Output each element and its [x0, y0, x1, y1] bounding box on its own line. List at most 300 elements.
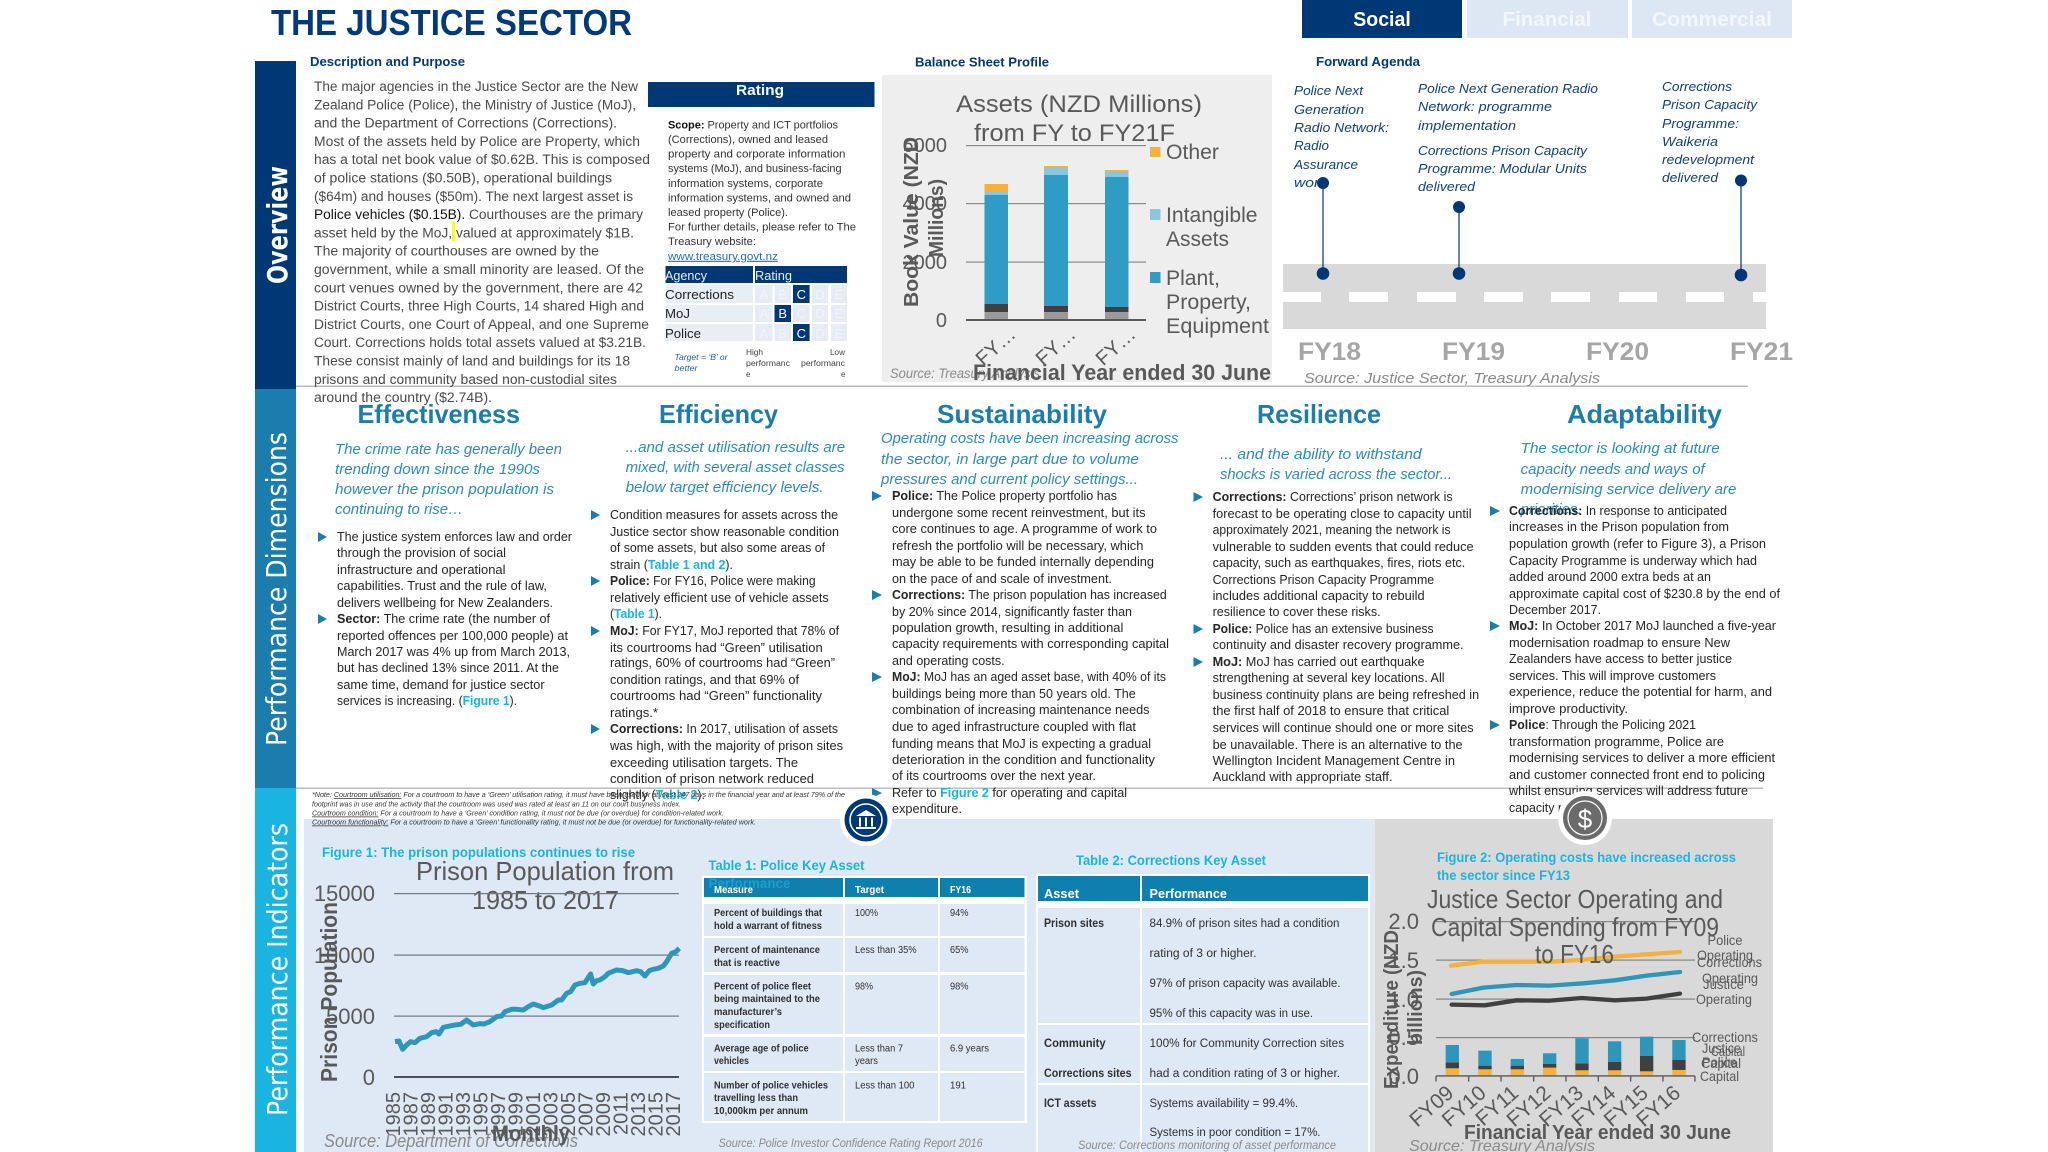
bullets: Police: Police has an extensive business — [1213, 622, 1434, 636]
table rows: Corrections sites — [1044, 1068, 1132, 1080]
bullets: refresh the portfolio will be necessary, which — [892, 539, 1143, 553]
table frame — [702, 876, 1027, 1123]
table rows: manufacturer’s — [714, 1007, 782, 1018]
bullets: Refer to Figure 2 for operating and capital — [892, 786, 1127, 800]
legend: Property, — [1166, 291, 1251, 314]
agenda text: FY18 — [1293, 84, 1389, 190]
x axis labels: FY11 — [1471, 1081, 1523, 1131]
timeline: forward agenda — [1283, 80, 1793, 387]
bullets: condition ratings, and that 69% of — [610, 673, 800, 687]
intro: continuing to rise… — [335, 502, 463, 518]
caption: Table 2: Corrections Key Asset — [1076, 853, 1266, 868]
rating table: MoJ — [665, 306, 690, 321]
caption: Table 1: Police Key Asset — [708, 858, 865, 873]
stacked bars — [984, 166, 1128, 320]
column: sustainability — [872, 399, 1178, 816]
x axis labels: FY09 — [1405, 1081, 1458, 1132]
table header: Measure — [714, 885, 753, 896]
bullets: approximately 2021, meaning the network is — [1213, 523, 1451, 537]
table rows: 94% — [950, 908, 969, 919]
bullets: deterioration in the condition and functionality — [892, 753, 1156, 767]
rating scope text: www.treasury.govt.nz — [667, 251, 778, 263]
bullets: modernisation roadmap to ensure New — [1509, 636, 1731, 650]
agenda text: FY21: Waikeria — [1662, 135, 1718, 149]
rating header — [648, 82, 874, 107]
panel: indicators background — [304, 819, 1375, 1152]
bullets: approximate capital cost of $230.8 by the end of — [1509, 587, 1781, 601]
bullets: December 2017. — [1509, 603, 1601, 617]
column: adaptability — [1490, 399, 1781, 815]
rating scope text: Treasury website: — [668, 236, 756, 248]
agenda text: FY21: Programme: — [1662, 117, 1739, 131]
rating table: B — [778, 326, 787, 341]
text block: description: Police vehicles ($0.15B). Courthouses are the primary — [314, 207, 643, 222]
x axis labels: 2017 — [663, 1092, 685, 1136]
x axis with ticks — [1436, 1076, 1695, 1082]
chart title — [1427, 884, 1723, 969]
text block: description: government, while a small minority are leased. Of the — [314, 262, 644, 277]
table rows: specification — [714, 1020, 770, 1031]
y axis labels: 0 — [936, 310, 947, 332]
bullets: but has declined 13% since 2011. At the — [337, 661, 559, 675]
agenda text: FY21: delivered — [1662, 171, 1719, 185]
text block: description: Court. Corrections holds total assets valued at $3.21B. — [314, 335, 646, 350]
bullets: Corrections: The prison population has increased — [892, 588, 1167, 602]
chart title: from FY to FY21F — [974, 120, 1175, 147]
table rows: had a condition rating of 3 or higher. — [1150, 1068, 1340, 1080]
x axis title: Financial Year ended 30 June — [1464, 1122, 1731, 1144]
bullets: undergone some recent reinvestment, but its — [892, 506, 1146, 520]
footnote: footprint was in use and the activity that the courtroom was used was rated at least an 11 on our court busyness index. — [312, 800, 681, 808]
bullets: resilience to cover these risks. — [1213, 605, 1381, 619]
bullets: delivers wellbeing for New Zealanders. — [337, 596, 553, 610]
bullets: relatively efficient use of vehicle assets — [610, 591, 829, 605]
table rows: Less than 100 — [855, 1080, 915, 1092]
x axis labels: FY13 — [1535, 1081, 1588, 1132]
operating lines — [1451, 952, 1680, 1005]
table rows — [714, 908, 989, 1117]
bullets: vulnerable to sudden events that could reduce — [1213, 540, 1474, 554]
figure 2: operating and capital spending chart — [1381, 850, 1762, 1152]
bullets: due to aged infrastructure coupled with flat — [892, 720, 1137, 734]
x axis labels: 1991 — [436, 1092, 458, 1136]
bullets: Corrections: In 2017, utilisation of assets — [610, 722, 838, 736]
bullets: services. This will improve customers — [1509, 669, 1716, 683]
x axis labels: 1995 — [470, 1092, 492, 1136]
bullets: buildings being more than 50 years old. The — [892, 687, 1136, 701]
table header — [1044, 887, 1227, 901]
table rows: Percent of police fleet — [714, 982, 812, 992]
agenda text: FY18: Generation — [1294, 103, 1364, 117]
figure 1: prison population chart — [314, 845, 685, 1151]
rating table — [665, 266, 847, 341]
bullets: slightly (Table 2). — [610, 788, 705, 802]
heading: Effectiveness — [358, 399, 520, 429]
table rows: rating of 3 or higher. — [1150, 948, 1256, 960]
rating table: E — [835, 287, 844, 302]
x axis labels: FY… — [972, 323, 1020, 370]
x axis labels: 2003 — [540, 1092, 562, 1136]
panel: rating — [648, 82, 874, 379]
column: efficiency — [591, 399, 845, 802]
series labels: Justice — [1703, 976, 1744, 992]
bullets: capacity, such as earthquakes, fires, riots etc. — [1213, 556, 1465, 570]
intro — [1220, 447, 1452, 483]
icon: institution building — [840, 794, 892, 846]
bullets: added around 2000 extra beds at an — [1509, 570, 1711, 584]
intro: however the prison population is — [335, 482, 554, 498]
caption overflow: Performance — [708, 876, 791, 891]
rating table: B — [778, 287, 787, 302]
agenda text: FY18: Radio Network: — [1294, 121, 1389, 135]
chart title: Prison Population from — [416, 856, 674, 886]
legend: Other — [1166, 141, 1219, 164]
x axis title: Monthly — [492, 1121, 571, 1146]
intro: pressures and current policy settings... — [880, 472, 1138, 488]
year labels: FY20 — [1586, 338, 1649, 366]
rating table: D — [815, 306, 825, 321]
bullets: capabilities. Trust and the rule of law, — [337, 579, 547, 593]
x axis labels: 1993 — [453, 1092, 475, 1136]
rating key: better — [674, 364, 698, 373]
table header — [714, 885, 971, 896]
x axis labels: 2005 — [558, 1092, 580, 1136]
bullets: Zealanders have access to better justice — [1509, 652, 1732, 666]
tab: financial: Financial — [1502, 9, 1592, 31]
intro: priorities. — [1520, 502, 1582, 518]
legend: Assets — [1166, 228, 1229, 251]
chart title — [416, 856, 674, 915]
series labels: Corrections — [1697, 954, 1762, 970]
table rows: 6.9 years — [950, 1044, 989, 1054]
rating header: Rating — [736, 82, 784, 99]
y axis title — [901, 137, 948, 307]
text block: description: prisons and community based non-custodial sites — [314, 372, 617, 387]
bullets: MoJ: MoJ has carried out earthquake — [1213, 655, 1425, 669]
y axis title: Expenditure (NZD — [1381, 930, 1403, 1089]
text block: description: around the country ($2.74B). — [314, 390, 492, 405]
bullets: funding means that MoJ is expecting a gradual — [892, 737, 1151, 751]
x axis labels: FY16 — [1632, 1081, 1685, 1132]
rating table: D — [815, 326, 825, 341]
rating scope text: information systems, corporate — [668, 178, 823, 190]
x axis labels — [972, 323, 1140, 370]
table rows: Less than 35% — [855, 945, 917, 956]
agenda text: FY18: Police Next — [1294, 84, 1364, 98]
intro: the sector, in large part due to volume — [881, 452, 1139, 468]
table 2: corrections key asset — [1036, 853, 1370, 1152]
bullets: The justice system enforces law and order — [337, 530, 572, 544]
rating key: e — [841, 370, 846, 379]
text block: description: has a total net book value of $0.62B. This is composed — [314, 152, 650, 167]
table rows: Number of police vehicles — [714, 1080, 828, 1092]
rating scope text: information systems, and owned and — [668, 192, 851, 204]
chart title: 1985 to 2017 — [472, 885, 619, 915]
x axis labels: FY… — [1032, 323, 1080, 370]
bullets: through the provision of social — [337, 546, 506, 560]
intro: modernising service delivery are — [1521, 482, 1736, 498]
bullets: may be able to be funded internally depending — [892, 555, 1154, 569]
table rows: Systems availability = 99.4%. — [1150, 1098, 1298, 1110]
rating scope text: Scope: Property and ICT portfolios — [668, 119, 838, 131]
table rows: being maintained to the — [714, 994, 820, 1005]
x axis labels: 2013 — [628, 1092, 650, 1136]
bullets: strengthening at several key locations. All — [1213, 671, 1445, 685]
footnote: Courtroom functionality: For a courtroom to have a ‘Green’ functionality rating, it must not be due (or overdue) for functionality-related work. — [312, 818, 756, 826]
agenda text: FY19: Corrections Prison Capacity — [1418, 144, 1588, 158]
rating table: C — [797, 306, 806, 321]
series labels: Police — [1702, 1054, 1737, 1070]
x axis title: Financial Year ended 30 June — [973, 360, 1271, 385]
sidebar: overview — [255, 61, 296, 389]
bullets: (Table 1). — [610, 607, 662, 621]
heading: Efficiency — [659, 399, 779, 429]
x axis labels — [1405, 1081, 1685, 1132]
table rows: 98% — [855, 982, 873, 992]
table rows: 100% — [855, 908, 878, 919]
series labels: Operating — [1696, 991, 1752, 1007]
table rows: vehicles — [714, 1056, 749, 1067]
legend: Plant, — [1166, 267, 1220, 290]
bullets: continuity and disaster recovery programme. — [1213, 638, 1464, 652]
bullets: modernising services to deliver a more efficient — [1509, 751, 1776, 765]
capital bars — [1446, 1037, 1686, 1075]
chart title — [956, 91, 1202, 147]
agenda text: FY18: Assurance — [1293, 158, 1358, 172]
y axis title: Millions) — [926, 179, 948, 257]
bullets: ratings, 60% of courtrooms had “Green” — [610, 656, 835, 670]
table rows: Community — [1044, 1038, 1106, 1050]
bullets: condition of prison network reduced — [610, 772, 814, 786]
heading: Adaptability — [1567, 399, 1723, 429]
column: effectiveness — [318, 399, 572, 708]
x axis labels: FY10 — [1438, 1081, 1491, 1132]
chart title: Justice Sector Operating and — [1427, 884, 1723, 914]
table rows: 65% — [950, 945, 969, 956]
bullets: was high, with the majority of prison sites — [609, 739, 843, 753]
y axis labels: 1.5 — [1388, 948, 1419, 973]
caption: Figure 1: The prison populations continues to rise — [322, 845, 635, 860]
chart: assets — [882, 75, 1272, 385]
y axis title: Prison Population — [316, 902, 342, 1082]
bullets: combination of increasing maintenance needs — [892, 703, 1150, 717]
source: Source: Justice Sector, Treasury Analysis — [1304, 370, 1601, 387]
text block: description: Most of the assets held by Police are Property, which — [314, 134, 640, 149]
footnote — [312, 790, 845, 826]
series labels: Justice — [1702, 1040, 1741, 1056]
text block: description: and the Department of Corrections (Corrections). — [314, 116, 617, 131]
x axis labels: 2009 — [593, 1092, 615, 1136]
rating table: A — [759, 287, 768, 302]
bullets: Corrections Prison Capacity Programme — [1213, 573, 1434, 587]
x axis labels: 1987 — [400, 1092, 422, 1136]
y axis labels — [1388, 909, 1419, 1089]
caption — [1437, 850, 1736, 883]
y axis title — [1381, 930, 1427, 1089]
table rows: Prison sites — [1044, 918, 1104, 930]
tab: social: Social — [1353, 9, 1411, 31]
y axis title: billions) — [1405, 970, 1427, 1045]
bullets: Condition measures for assets across the — [610, 508, 838, 522]
bullets: Auckland with appropriate staff. — [1213, 770, 1393, 784]
table rows: that is reactive — [714, 958, 780, 969]
intro: ...and asset utilisation results are — [626, 440, 845, 456]
text block: description: The major agencies in the Justice Sector are the New — [314, 79, 638, 94]
bullets: Corrections: Corrections’ prison network is — [1213, 490, 1453, 504]
text block: description: The majority of courthouses are owned by the — [314, 244, 599, 259]
bullets: Capacity Programme is underway which had — [1509, 554, 1757, 568]
pins — [1317, 174, 1747, 281]
y axis labels: 1.0 — [1388, 987, 1419, 1012]
agenda text: FY19 — [1418, 82, 1598, 194]
agenda text: FY18: work — [1294, 176, 1328, 190]
rating table: Corrections — [665, 287, 735, 302]
intro: trending down since the 1990s — [335, 462, 540, 478]
table rows: ICT assets — [1044, 1098, 1096, 1110]
table rows — [1044, 918, 1344, 1139]
y axis title: Book Value (NZD — [901, 137, 923, 307]
text block: description: asset held by the MoJ, valued at approximately $1B. — [314, 225, 634, 240]
bullets: Justice sector show reasonable condition — [610, 525, 839, 539]
rating scope text — [667, 119, 856, 263]
table header: Asset — [1044, 887, 1080, 901]
bullets: includes additional capacity to rebuild — [1213, 589, 1425, 603]
bullets — [1490, 504, 1781, 815]
tab: social — [1302, 0, 1462, 38]
text block: description: District Courts, one Court of Appeal, and one Supreme — [314, 317, 649, 332]
footnote: Courtroom condition: For a courtroom to have a ‘Green’ condition rating, it must not be due (or overdue) for condition-related work. — [312, 808, 724, 818]
x axis labels — [383, 1092, 685, 1136]
agenda text: FY21: Prison Capacity — [1662, 98, 1758, 112]
rating table: E — [835, 326, 844, 341]
chart title: Assets (NZD Millions) — [956, 91, 1202, 118]
table rows: 10,000km per annum — [714, 1106, 808, 1117]
agenda text: FY19: implementation — [1418, 119, 1516, 133]
bullets: be unavailable. There is an alternative to the — [1213, 738, 1463, 752]
bullets: Corrections: In response to anticipated — [1509, 504, 1727, 518]
bullets: and operating costs. — [892, 654, 1005, 668]
sidebar: overview: Overview — [261, 166, 294, 284]
rating key: performanc — [801, 359, 845, 368]
rating table: Police — [665, 326, 701, 341]
table rows: years — [855, 1056, 878, 1067]
agenda text: FY19: Network: programme — [1418, 100, 1552, 114]
bullets: expenditure. — [892, 802, 962, 816]
bullets: ratings.* — [610, 706, 658, 720]
series labels: Capital — [1701, 1055, 1741, 1071]
bullets: reported offences per 100,000 people) at — [337, 629, 569, 643]
bullets: MoJ: For FY17, MoJ reported that 78% of — [610, 624, 840, 638]
data line — [395, 948, 679, 1049]
table rows: Less than 7 — [855, 1044, 903, 1054]
bullets: population growth, resulting in additional — [892, 621, 1123, 635]
bullets: exceeding utilisation targets. The — [610, 756, 798, 770]
bullets: and customer connected front end to policing — [1509, 768, 1765, 782]
agenda text: FY19: Programme: Modular Units — [1418, 162, 1587, 176]
rating key: High — [746, 348, 763, 357]
rating key — [674, 348, 846, 379]
bullets: Police: The Police property portfolio has — [892, 489, 1117, 503]
intro: shocks is varied across the sector... — [1220, 467, 1452, 483]
heading: description and purpose: Description and Purpose — [310, 54, 465, 69]
table rows: 97% of prison capacity was available. — [1150, 978, 1340, 990]
x axis labels: 2007 — [576, 1092, 598, 1136]
agenda text: FY19: Police Next Generation Radio — [1418, 82, 1598, 96]
table rows: Percent of maintenance — [714, 945, 820, 956]
bullets: business continuity plans are being refreshed in — [1213, 688, 1479, 702]
table header: Target — [855, 885, 885, 896]
intro — [626, 440, 845, 496]
text block: description: These consist mainly of land and buildings for its 18 — [314, 354, 630, 368]
x axis labels: 2015 — [646, 1092, 668, 1136]
table header: Performance — [1150, 887, 1227, 901]
rating scope text: For further details, please refer to The — [668, 222, 856, 234]
rating key: e — [746, 370, 751, 379]
bullets — [318, 530, 572, 708]
bullets: the first half of 2018 to ensure that critical — [1213, 704, 1449, 718]
text block: description — [314, 79, 650, 405]
table header: FY16 — [950, 885, 971, 896]
x axis labels: 2001 — [523, 1092, 545, 1136]
heading: forward agenda: Forward Agenda — [1316, 55, 1421, 69]
y axis labels — [314, 881, 375, 1090]
bullets: MoJ: MoJ has an aged asset base, with 40% of its — [892, 670, 1166, 684]
y axis labels: 0 — [363, 1065, 375, 1090]
rating table: A — [759, 326, 768, 341]
y axis labels: 15000 — [314, 881, 375, 906]
rating table: D — [815, 287, 825, 302]
rating table: E — [835, 306, 844, 321]
y axis labels: 0.0 — [1388, 1064, 1419, 1089]
rating key: performanc — [746, 359, 790, 368]
agenda text: FY19: delivered — [1418, 180, 1476, 194]
bullets: of its courtrooms over the next year. — [892, 769, 1096, 783]
series labels: Corrections — [1692, 1029, 1758, 1045]
table rows: 95% of this capacity was in use. — [1150, 1008, 1313, 1020]
series labels: Operating — [1697, 947, 1753, 963]
footnote: *Note: Courtroom utilisation: For a courtroom to have a ‘Green’ utilisation rating, it must have been used for at least 247 days in the financial year and at least 79% of the — [312, 790, 845, 799]
table rows: travelling less than — [714, 1093, 798, 1104]
rating table: Agency — [665, 268, 707, 283]
bullets — [591, 508, 843, 802]
legend: Intangible — [1166, 204, 1258, 227]
bullets: whilst ensuring services will address future — [1508, 784, 1748, 798]
bullets: March 2017 was 4% up from March 2013, — [337, 645, 570, 659]
x axis labels: 1999 — [506, 1092, 528, 1136]
y axis labels: 2000 — [902, 252, 947, 274]
rating table: C — [797, 287, 806, 302]
icon: dollar: $ — [1578, 804, 1593, 834]
legend: Equipment — [1166, 315, 1269, 338]
y axis labels — [902, 135, 947, 332]
x axis labels: 1997 — [488, 1092, 510, 1136]
rating table: C — [797, 326, 806, 341]
table frame — [1036, 874, 1370, 1152]
bullets: transformation programme, Police are — [1509, 735, 1724, 749]
intro — [880, 431, 1178, 488]
tab: commercial: Commercial — [1652, 9, 1772, 31]
source: Source: Department of Corrections — [324, 1131, 578, 1151]
y axis labels: 0.5 — [1388, 1025, 1419, 1050]
text block: description: ($64m) and houses ($50m). The next largest asset is — [314, 189, 633, 204]
category tabs — [1302, 0, 1792, 38]
series labels: Police — [1708, 932, 1743, 948]
intro: The sector is looking at future — [1521, 441, 1720, 457]
bullets: MoJ: In October 2017 MoJ launched a five-year — [1509, 619, 1776, 633]
year labels: FY18 — [1298, 338, 1361, 366]
bullets: experience, reduce the potential for harm, and — [1509, 685, 1772, 699]
bullets — [872, 489, 1169, 816]
